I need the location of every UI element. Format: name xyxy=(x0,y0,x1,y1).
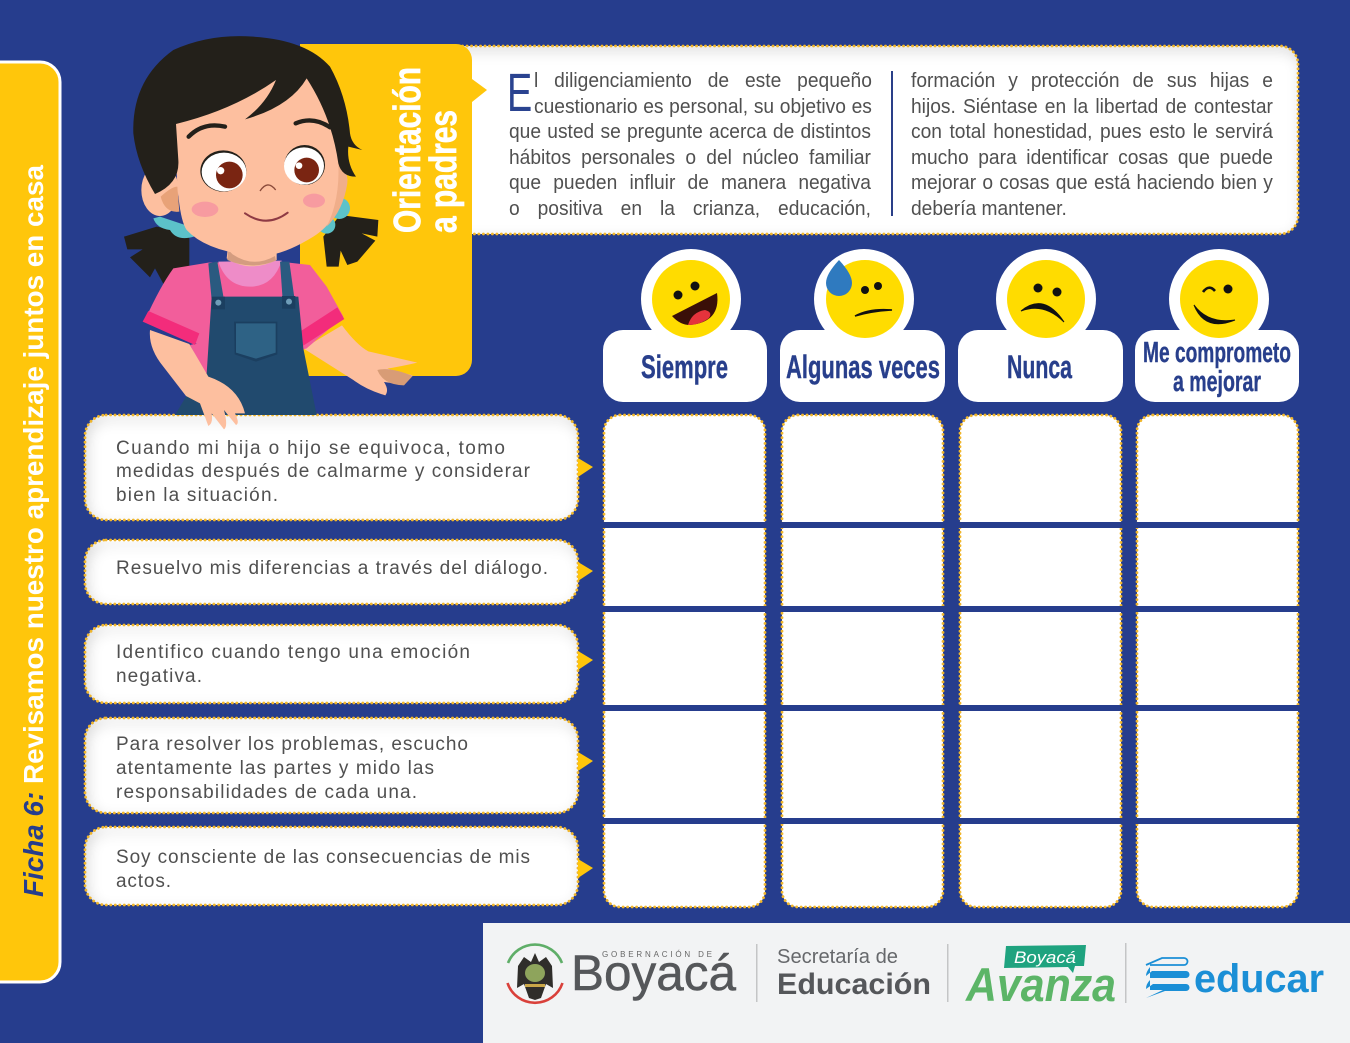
right arm xyxy=(303,325,417,395)
guidance text block: debería mantener. xyxy=(911,198,1067,220)
header: Me comprometo a mejorar xyxy=(1135,249,1299,402)
pigtails xyxy=(124,227,189,285)
logo: Secretaría de Educación: Secretaría de xyxy=(777,946,898,968)
logo: Secretaría de Educación xyxy=(777,946,931,1001)
divider: guidance columns xyxy=(891,71,893,216)
divider xyxy=(1125,943,1126,1003)
logo: Secretaría de Educación: Educación xyxy=(777,968,931,1001)
drop cap: E xyxy=(507,63,532,123)
logo: Gobernación de Boyacá xyxy=(508,945,736,1003)
panel: yellow Orientación a padres tab: a padres xyxy=(423,110,465,233)
answer column 2 xyxy=(778,415,948,907)
face xyxy=(141,164,179,216)
logo: Boyacá Avanza: Avanza xyxy=(965,958,1116,1011)
panel: yellow Orientación a padres tab xyxy=(300,44,487,376)
guidance text block: mucho para identificar cosas que puede xyxy=(911,147,1273,169)
scrunchies xyxy=(153,217,194,238)
hair xyxy=(133,36,362,194)
panel: yellow Orientación a padres tab: Orientación xyxy=(387,67,429,233)
statement 3 xyxy=(85,625,593,703)
statement 3: Identifico cuando tengo una emoción xyxy=(116,642,470,663)
statement 1 xyxy=(85,415,593,520)
statement 3: negativa. xyxy=(116,666,202,687)
guidance text block: formación y protección de sus hijas e xyxy=(911,70,1273,92)
answer column 3 xyxy=(956,415,1126,907)
answer column 4 xyxy=(1133,415,1303,907)
panel: parent guidance text background xyxy=(440,46,1298,234)
collar xyxy=(218,261,282,287)
header: Me comprometo a mejorar: a mejorar xyxy=(1173,366,1261,398)
divider xyxy=(947,944,948,1002)
statement 1: medidas después de calmarme y considerar xyxy=(116,461,531,482)
eyes xyxy=(200,150,246,192)
statement 4: atentamente las partes y mido las xyxy=(116,758,434,779)
guidance text block: hábitos personales o del núcleo familiar xyxy=(509,147,871,169)
statement 2: Resuelvo mis diferencias a través del diálogo. xyxy=(116,558,548,579)
neck xyxy=(227,243,277,266)
header: Nunca xyxy=(958,249,1123,402)
guidance text block: hijos. Siéntase en la libertad de contestar xyxy=(911,96,1273,118)
character: girl in overalls xyxy=(124,36,417,429)
statement 4: Para resolver los problemas, escucho xyxy=(116,734,468,755)
header: Nunca: Nunca xyxy=(1007,349,1072,385)
brows nose cheeks mouth xyxy=(189,125,225,137)
statement 4: responsabilidades de cada una. xyxy=(116,782,417,803)
answer column 1 xyxy=(600,415,770,907)
guidance text block: l diligenciamiento de este pequeño xyxy=(534,70,872,92)
header: Algunas veces xyxy=(780,249,945,402)
statement 5: Soy consciente de las consecuencias de mis xyxy=(116,847,530,868)
statement 1: bien la situación. xyxy=(116,485,278,506)
shirt xyxy=(145,262,343,378)
guidance text block: que usted se pregunte acerca de distintos xyxy=(509,121,871,143)
guidance text block: que pueden influir de manera negativa xyxy=(509,172,871,194)
guidance text block: o positiva en la crianza, educación, xyxy=(509,198,871,220)
logo: Gobernación de Boyacá: Boyacá xyxy=(571,945,736,1001)
left arm and hand xyxy=(150,330,245,429)
statement 2 xyxy=(85,540,593,604)
statement 4 xyxy=(85,718,593,813)
divider xyxy=(756,944,758,1002)
side tab: Ficha 6 title: Ficha 6: Revisamos nuestro aprendizaje juntos en casa xyxy=(18,165,49,897)
statement 1: Cuando mi hija o hijo se equivoca, tomo xyxy=(116,438,505,459)
footer band xyxy=(483,923,1350,1043)
statement 5: actos. xyxy=(116,871,171,892)
header: Siempre xyxy=(603,249,767,402)
statement 5 xyxy=(85,827,593,905)
logo: Gobernación de Boyacá: GOBERNACIÓN DE xyxy=(602,950,712,959)
header: Algunas veces: Algunas veces xyxy=(786,349,940,385)
logo: educar: educar xyxy=(1194,957,1324,1001)
guidance text block: mejorar o cosas que está haciendo bien y xyxy=(911,172,1273,194)
logo: Boyacá Avanza: Boyacá xyxy=(1014,948,1076,967)
overalls xyxy=(175,297,317,415)
side tab: Ficha 6 title xyxy=(0,62,60,982)
guidance text block: cuestionario es personal, su objetivo es xyxy=(534,96,872,118)
guidance text block: con total honestidad, pues esto le servirá xyxy=(911,121,1273,143)
header: Siempre: Siempre xyxy=(641,349,728,385)
